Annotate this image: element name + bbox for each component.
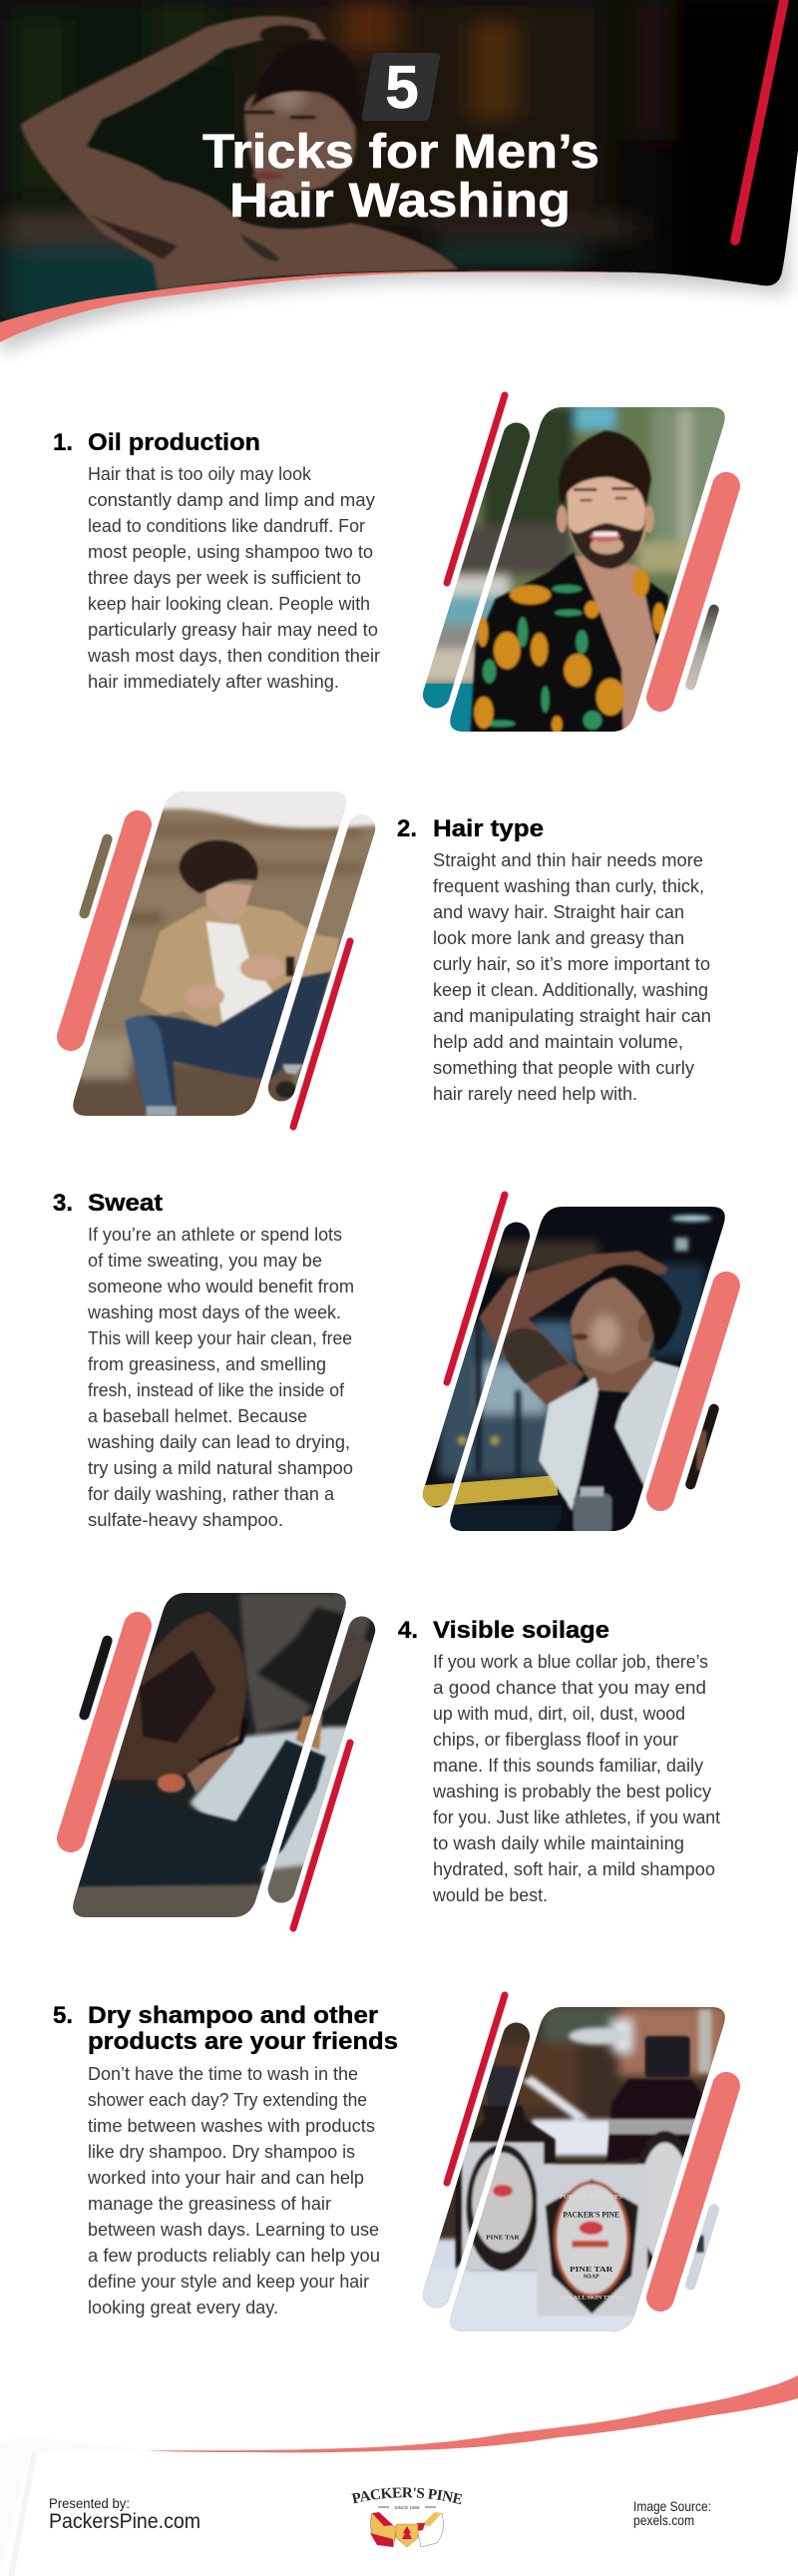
image source: Image Source: — [633, 2498, 711, 2514]
presented by: Presented by: — [49, 2495, 130, 2511]
leaves — [483, 585, 601, 730]
section 1: oil production text: keep hair looking clean. People with — [88, 594, 370, 614]
eyes and mouth — [244, 111, 275, 114]
hands — [185, 984, 224, 1008]
section 3: sweat text: a baseball helmet. Because — [88, 1406, 307, 1426]
section 4: visible soilage text: would be best. — [432, 1885, 548, 1905]
section 5: dry shampoo text: time between washes with products — [88, 2116, 375, 2136]
tattoo — [239, 233, 280, 261]
car underside — [239, 1594, 379, 1734]
section 3: sweat text: If you’re an athlete or spend lots — [88, 1225, 342, 1245]
number badge — [362, 53, 440, 121]
product label text: FOR ALL SKIN TYPES — [560, 2296, 623, 2301]
header photo — [0, 0, 798, 329]
section 4: visible soilage text: chips, or fiberglass floof in your — [433, 1730, 678, 1750]
hair — [113, 1612, 246, 1780]
section 3: sweat text: from greasiness, and smelling — [88, 1354, 326, 1374]
section 2: hair type text: keep it clean. Additionally, washing — [433, 980, 708, 1000]
section 3: sweat text: try using a mild natural shampoo — [88, 1458, 353, 1478]
logo: Packer's Pine — [351, 2487, 463, 2547]
arm — [479, 1251, 668, 1410]
gloved hand and arm — [322, 1630, 372, 1714]
section 5: dry shampoo text: define your style and keep your hair — [88, 2272, 369, 2292]
image source — [633, 2498, 711, 2528]
beard — [569, 519, 645, 569]
pineapples — [474, 569, 665, 734]
shadow under header — [0, 200, 788, 354]
section 3: sweat text: This will keep your hair clean, free — [88, 1328, 352, 1348]
section 1: oil production text: Oil production — [88, 429, 260, 456]
product label text — [486, 2196, 623, 2301]
coral stripe — [71, 1626, 138, 1838]
armpit hair — [87, 213, 179, 259]
section 5: dry shampoo text: worked into your hair and can help — [87, 2168, 364, 2188]
section 4: visible soilage text: 4. — [398, 1617, 418, 1644]
section 2: hair type text: Hair type — [433, 815, 544, 842]
section 1: photo of man in pineapple shirt with stripes — [423, 391, 740, 732]
section 1: oil production text: hair immediately after washing. — [88, 672, 339, 692]
shirt — [471, 552, 623, 734]
section 3: photo of sweating man with towel and stripes — [423, 1192, 740, 1531]
section 3: sweat text: Sweat — [88, 1190, 163, 1217]
section 4: visible soilage text: hydrated, soft hair, a mild shampoo — [433, 1859, 715, 1879]
section 3: sweat text: someone who would benefit from — [88, 1277, 354, 1296]
left box — [462, 2143, 544, 2271]
section 2: photo of man in tan jacket with stripes — [57, 791, 375, 1130]
section 1: oil production text: wash most days, then condition their — [87, 646, 380, 666]
title — [202, 126, 599, 228]
section 3: sweat text: washing daily can lead to drying, — [87, 1432, 350, 1452]
section 5: dry shampoo text: Dry shampoo and other — [88, 2002, 378, 2029]
red stripe — [447, 1195, 505, 1382]
section 3: sweat text: fresh, instead of like the inside of — [88, 1380, 345, 1400]
product label text: PACKER'S PINE — [563, 2211, 619, 2220]
red stripe — [447, 395, 505, 583]
section 5: dry shampoo text: a few products reliably can help you — [88, 2246, 380, 2266]
crest wings and shield — [370, 2512, 443, 2547]
neck and face — [576, 1357, 655, 1394]
section 4: visible soilage text: to wash daily while maintaining — [433, 1833, 684, 1853]
section 1: oil production text: Hair that is too oily may look — [88, 464, 312, 484]
red stripe — [735, 0, 785, 241]
section 2: hair type text — [397, 815, 711, 1104]
section 5: dry shampoo text: looking great every day. — [88, 2298, 278, 2318]
section 4: visible soilage text — [398, 1617, 720, 1905]
section 1: oil production text: lead to conditions like dandruff. For — [88, 516, 365, 536]
section 4: visible soilage text: up with mud, dirt, oil, dust, wood — [433, 1704, 685, 1724]
section 1: oil production text: constantly damp and limp and may — [88, 490, 375, 510]
section 4: visible soilage text: If you work a blue collar job, there’s — [433, 1652, 708, 1672]
section 2: hair type text: frequent washing than curly, thick, — [433, 876, 704, 896]
glasses — [198, 1717, 249, 1764]
image source: pexels.com — [633, 2512, 694, 2528]
section 2: hair type text: look more lank and greasy than — [433, 928, 684, 948]
section 1: oil production text — [53, 429, 380, 692]
section 5: dry shampoo text: Don’t have the time to wash in the — [88, 2064, 358, 2084]
tattoo — [502, 1328, 569, 1384]
section 2: hair type text: 2. — [397, 815, 417, 842]
bottle — [574, 1494, 611, 1534]
section 3: sweat text: 3. — [53, 1190, 73, 1217]
coral stripe — [660, 2086, 726, 2298]
ground — [63, 1884, 329, 1938]
product label text: PINE TAR — [486, 2234, 520, 2241]
section 5: dry shampoo text: between wash days. Learning to use — [88, 2220, 379, 2240]
right bottle — [645, 2036, 690, 2078]
section 1: oil production text: particularly greasy hair may need to — [88, 620, 378, 640]
chest — [576, 556, 655, 734]
red stripe — [447, 1995, 505, 2183]
section 5: photo of pine tar products in snow with stripes — [399, 1976, 798, 2335]
face — [244, 83, 356, 200]
face — [567, 476, 646, 569]
arm and torso — [20, 16, 458, 289]
jacket — [77, 1740, 326, 1886]
logo: Packer's Pine: SINCE 1869 — [394, 2505, 420, 2510]
brows and eyes — [574, 488, 597, 491]
coral stripe — [660, 486, 726, 698]
section 5: dry shampoo text: 5. — [53, 2002, 73, 2029]
section 5: dry shampoo text — [53, 2002, 398, 2318]
jacket — [140, 905, 339, 1031]
section 4: photo of mechanic under car with stripes — [57, 1593, 375, 1932]
section 1: oil production text: 1. — [53, 429, 73, 456]
coral stripe — [660, 1286, 726, 1497]
coral swoosh — [0, 271, 638, 342]
product label text: PURE AS THE PINES — [560, 2196, 623, 2201]
towel — [539, 1377, 598, 1510]
section 3: sweat text — [53, 1190, 354, 1530]
shirt — [206, 921, 272, 1035]
section 4: visible soilage text: a good chance that you may end — [433, 1678, 706, 1698]
ear — [158, 1774, 186, 1793]
product label text: PINE TAR — [570, 2265, 613, 2274]
section 4: visible soilage text: for you. Just like athletes, if you want — [433, 1807, 720, 1827]
section 2: hair type text: something that people with curly — [433, 1058, 694, 1078]
small sliver photo — [686, 605, 719, 691]
black shirt — [556, 1390, 645, 1532]
jeans — [143, 971, 331, 1107]
product label text: SOAP — [584, 2275, 599, 2281]
snow base — [412, 2239, 711, 2335]
section 3: sweat text: for daily washing, rather than a — [88, 1484, 335, 1504]
section 3: sweat text: sulfate-heavy shampoo. — [88, 1510, 283, 1530]
center box — [537, 2164, 647, 2316]
section 2: hair type text: curly hair, so it’s more important to — [433, 954, 710, 974]
hair — [249, 42, 361, 133]
section 2: hair type text: and wavy hair. Straight hair can — [433, 902, 684, 922]
sky — [190, 1727, 362, 1869]
footer coral swoosh — [148, 2375, 798, 2452]
section 2: hair type text: and manipulating straight hair can — [433, 1006, 711, 1026]
section 4: visible soilage text: washing is probably the best policy — [432, 1782, 711, 1802]
coral stripe — [71, 824, 138, 1037]
section 3: sweat text: washing most days of the week. — [87, 1302, 341, 1322]
section 1: oil production text: three days per week is sufficient to — [88, 568, 361, 588]
red stripe — [293, 1743, 350, 1928]
section 5: dry shampoo text: products are your friends — [88, 2028, 398, 2055]
section 5: dry shampoo text: shower each day? Try extending the — [88, 2090, 367, 2110]
presented by: PackersPine.com — [49, 2510, 200, 2533]
section 3: sweat text: of time sweating, you may be — [88, 1251, 322, 1271]
face and hair — [206, 881, 252, 921]
footer faint background stripe — [0, 2435, 148, 2576]
number badge: 5 — [385, 54, 419, 121]
hair — [601, 1265, 681, 1351]
section 4: visible soilage text: mane. If this sounds familiar, daily — [433, 1756, 703, 1776]
title: Hair Washing — [229, 175, 571, 228]
section 5: dry shampoo text: manage the greasiness of hair — [88, 2194, 331, 2214]
section 2: hair type text: hair rarely need help with. — [433, 1084, 637, 1104]
section 2: hair type text: help add and maintain volume, — [433, 1032, 683, 1052]
hair — [559, 431, 651, 509]
section 1: oil production text: most people, using shampoo two to — [88, 542, 373, 562]
header banner — [0, 0, 798, 354]
section 4: visible soilage text: Visible soilage — [433, 1617, 609, 1644]
face — [183, 1717, 246, 1794]
left bottle — [487, 2066, 519, 2106]
section 2: hair type text: Straight and thin hair needs more — [433, 850, 703, 870]
red stripe — [293, 941, 350, 1127]
logo: Packer's Pine: PACKER'S PINE — [351, 2487, 463, 2505]
title: Tricks for Men’s — [202, 126, 599, 179]
section 5: dry shampoo text: like dry shampoo. Dry shampoo is — [88, 2142, 355, 2162]
presented by — [49, 2495, 200, 2533]
